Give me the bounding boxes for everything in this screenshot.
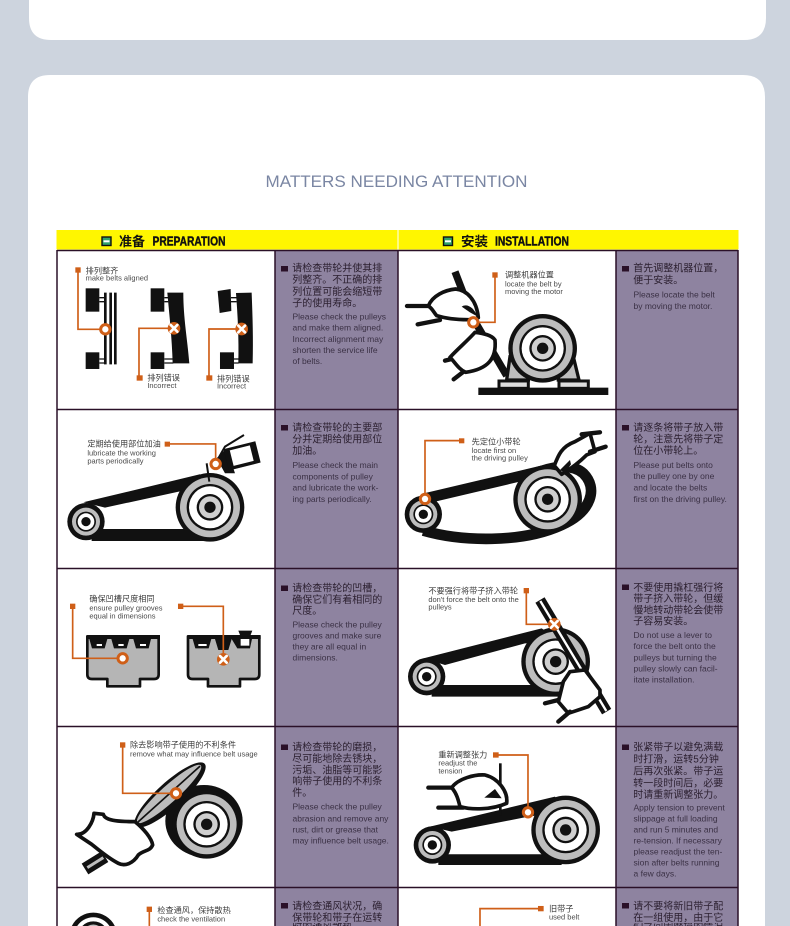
text panel: align: 请检查带轮并使其排 bbox=[292, 262, 382, 274]
text panel: locate: 便于安装。 bbox=[633, 274, 683, 286]
text panel: tension: and run 5 minutes and bbox=[634, 824, 718, 834]
text panel: tension: 时打滑，运转5分钟 bbox=[633, 752, 719, 765]
text panel: do not force: pulleys but turning the bbox=[634, 652, 717, 662]
illustration: locate first on the driving pulley: 先定位小带轮 bbox=[472, 436, 521, 446]
illustration: lubricate: lubricate the working bbox=[87, 449, 156, 458]
illustration: readjust the tension: tension bbox=[438, 766, 462, 775]
text panel: tension: slippage at full loading bbox=[634, 813, 718, 823]
text panel: grooves: 尺度。 bbox=[292, 604, 322, 617]
header bar: installation: 安装 bbox=[461, 234, 488, 249]
text panel: driving pulley: the pulley one by one bbox=[634, 471, 715, 481]
text panel: lubricate: components of pulley bbox=[292, 472, 374, 482]
text panel: grooves: grooves and make sure bbox=[292, 631, 382, 641]
text panel: locate: by moving the motor. bbox=[634, 301, 712, 311]
text panel: align: 列位置可能会缩短带 bbox=[292, 285, 382, 298]
illustration: pulley grooves: equal in dimensions bbox=[89, 611, 156, 620]
illustration: used belt: used belt bbox=[549, 912, 580, 921]
illustration: locate the belt by moving the motor bbox=[407, 270, 608, 395]
illustration: locate the belt by moving the motor: 调整机器位置 bbox=[505, 270, 554, 280]
text panel: abrasion: 响带子使用的不利条 bbox=[292, 774, 382, 788]
header bar: preparation: 准备 bbox=[119, 234, 145, 249]
illustration: check the ventilation: 检查通风，保持散热 bbox=[157, 905, 231, 915]
text panel: do not force: force the belt onto the bbox=[634, 641, 716, 651]
text panel: locate bbox=[622, 262, 723, 311]
text panel: driving pulley: 轮，注意先将带子定 bbox=[633, 432, 723, 446]
text panel: align bbox=[281, 262, 386, 366]
illustration: remove what may influence belt usage: remove what may influence belt usage bbox=[130, 749, 258, 758]
top card bbox=[29, 0, 766, 40]
illustration: lubricate: 定期给使用部位加油 bbox=[87, 439, 161, 449]
text panel: abrasion: abrasion and remove any bbox=[292, 813, 389, 823]
text panel: tension: sion after belts running bbox=[634, 858, 720, 868]
illustration: pulley grooves: ensure pulley grooves bbox=[89, 604, 163, 613]
text panel: used belt: 请不要将新旧带子配 bbox=[633, 900, 723, 912]
illustration: locate first on the driving pulley bbox=[405, 432, 606, 539]
illustration: check the ventilation bbox=[72, 905, 231, 926]
text panel: abrasion: rust, dirt or grease that bbox=[292, 824, 379, 834]
illustration: belt alignment: Incorrect bbox=[217, 382, 247, 391]
illustration: readjust the tension: 重新调整张力 bbox=[438, 749, 487, 759]
text panel: abrasion: may influence belt usage. bbox=[292, 835, 389, 845]
illustration: belt alignment: 排列整齐 bbox=[86, 265, 118, 275]
text panel: ventilation: 保带轮和带子在运转 bbox=[292, 911, 382, 924]
illustration: check the ventilation: check the ventilation bbox=[157, 914, 225, 923]
text panel: tension: please readjust the ten- bbox=[634, 847, 723, 857]
header bar: installation: INSTALLATION bbox=[495, 234, 569, 248]
text panel: abrasion: 尽可能地除去锈块， bbox=[292, 752, 382, 765]
text panel: do not force: pulley slowly can facil- bbox=[634, 663, 718, 673]
text panel: do not force: Do not use a lever to bbox=[634, 630, 712, 640]
illustration: locate first on the driving pulley: the driving pulley bbox=[472, 453, 528, 462]
text panel: lubricate: 分并定期给使用部位 bbox=[292, 432, 382, 446]
text panel: lubricate: Please check the main bbox=[292, 460, 378, 470]
text panel: do not force: 不要使用撬杠强行将 bbox=[633, 581, 723, 594]
text panel: abrasion: 件。 bbox=[292, 787, 312, 799]
illustration: belt alignment: 排列错误 bbox=[217, 373, 250, 383]
illustration: remove what may influence belt usage: 除去影响带子使用的不利条件 bbox=[130, 740, 236, 750]
text panel: tension: 张紧带子以避免满载 bbox=[633, 740, 723, 754]
text panel: do not force: 带子挤入带轮，但缓 bbox=[633, 592, 723, 605]
text panel: abrasion bbox=[281, 740, 389, 845]
illustration: remove what may influence belt usage bbox=[77, 740, 258, 869]
text panel: grooves: they are all equal in bbox=[292, 642, 366, 652]
text panel: driving pulley: 位在小带轮上。 bbox=[633, 444, 703, 457]
text panel: tension bbox=[622, 740, 725, 879]
text panel: abrasion: Please check the pulley bbox=[292, 802, 383, 812]
text panel: grooves: dimensions. bbox=[292, 653, 338, 663]
text panel: locate: Please locate the belt bbox=[634, 290, 715, 300]
illustration: belt alignment bbox=[75, 265, 253, 391]
text panel: abrasion: 污垢、油脂等可能影 bbox=[292, 763, 382, 776]
text panel: lubricate: 加油。 bbox=[292, 444, 322, 457]
text panel: tension: 后再次张紧。带子运 bbox=[633, 764, 723, 778]
illustration: lubricate: parts periodically bbox=[87, 456, 144, 465]
text panel: tension: Apply tension to prevent bbox=[634, 802, 725, 812]
text panel: ventilation bbox=[281, 900, 382, 924]
text panel: do not force bbox=[622, 581, 723, 684]
text panel: grooves bbox=[281, 582, 383, 663]
illustration: pulley grooves bbox=[70, 594, 261, 686]
illustration: locate the belt by moving the motor: locate the belt by bbox=[505, 280, 562, 289]
text panel: align: shorten the service life bbox=[292, 345, 378, 355]
illustration: used belt bbox=[480, 904, 580, 926]
text panel: grooves: Please check the pulley bbox=[292, 619, 383, 629]
text panel: ventilation: 请检查通风状况，确 bbox=[292, 900, 382, 912]
text panel: do not force: 慢地转动带轮会使带 bbox=[633, 603, 723, 616]
illustration: pulley grooves: 确保凹槽尺度相同 bbox=[89, 594, 155, 604]
text panel: align: Please check the pulleys bbox=[292, 312, 386, 322]
illustration: locate the belt by moving the motor: moving the motor bbox=[505, 287, 563, 296]
text panel: do not force: 子容易安装。 bbox=[633, 614, 693, 628]
text panel: driving pulley bbox=[622, 421, 727, 504]
text panel: tension: 时请重新调整张力。 bbox=[633, 788, 723, 801]
header bar: preparation: PREPARATION bbox=[152, 234, 226, 248]
illustration: do not force the belt: pulleys bbox=[428, 603, 452, 612]
text panel: used belt bbox=[622, 900, 723, 924]
text panel: lubricate: ing parts periodically. bbox=[292, 494, 372, 504]
illustration: readjust the tension: readjust the bbox=[438, 759, 477, 768]
text panel: lubricate: and lubricate the work- bbox=[292, 483, 379, 493]
header bar: installation bbox=[398, 230, 738, 250]
illustration: belt alignment: make belts aligned bbox=[86, 274, 148, 283]
grid table background bbox=[56, 250, 738, 926]
text panel: driving pulley: 请逐条将带子放入带 bbox=[633, 421, 723, 434]
illustration: belt alignment: Incorrect bbox=[147, 381, 177, 390]
illustration: do not force the belt bbox=[408, 585, 607, 722]
text panel: tension: 转一段时间后，必要 bbox=[633, 776, 723, 790]
title: MATTERS NEEDING ATTENTION bbox=[266, 172, 528, 191]
text panel: locate: 首先调整机器位置， bbox=[633, 262, 723, 274]
text panel: tension: re-tension. If necessary bbox=[634, 835, 723, 845]
illustration: used belt: 旧带子 bbox=[549, 904, 573, 913]
text panel: used belt: 在一组使用，由于它 bbox=[633, 911, 723, 924]
text panel: driving pulley: Please put belts onto bbox=[634, 460, 713, 470]
text panel: align: of belts. bbox=[292, 356, 322, 366]
text panel: align: 子的使用寿命。 bbox=[292, 296, 362, 310]
illustration: readjust the tension bbox=[414, 749, 600, 865]
text panel: driving pulley: and locate the belts bbox=[634, 483, 707, 493]
illustration: locate first on the driving pulley: locate first on bbox=[472, 446, 516, 455]
text panel: grooves: 请检查带轮的凹槽， bbox=[292, 582, 382, 594]
text panel: align: Incorrect alignment may bbox=[292, 334, 384, 344]
illustration: do not force the belt: don't force the belt onto the bbox=[428, 595, 519, 604]
illustration: belt alignment: 排列错误 bbox=[147, 373, 180, 383]
header bar: preparation bbox=[56, 230, 398, 250]
illustration: lubricate bbox=[67, 435, 261, 542]
text panel: align: 列整齐。不正确的排 bbox=[292, 273, 382, 286]
text panel: lubricate: 请检查带轮的主要部 bbox=[292, 421, 382, 434]
text panel: tension: a few days. bbox=[634, 869, 676, 879]
text panel: grooves: 确保它们有着相同的 bbox=[292, 593, 382, 606]
text panel: do not force: itate installation. bbox=[634, 674, 694, 684]
text panel: abrasion: 请检查带轮的磨损， bbox=[292, 740, 382, 754]
illustration: do not force the belt: 不要强行将带子挤入带轮 bbox=[428, 585, 518, 595]
text panel: lubricate bbox=[281, 421, 382, 504]
text panel: driving pulley: first on the driving pulley. bbox=[634, 494, 727, 504]
text panel: align: and make them aligned. bbox=[292, 322, 383, 332]
